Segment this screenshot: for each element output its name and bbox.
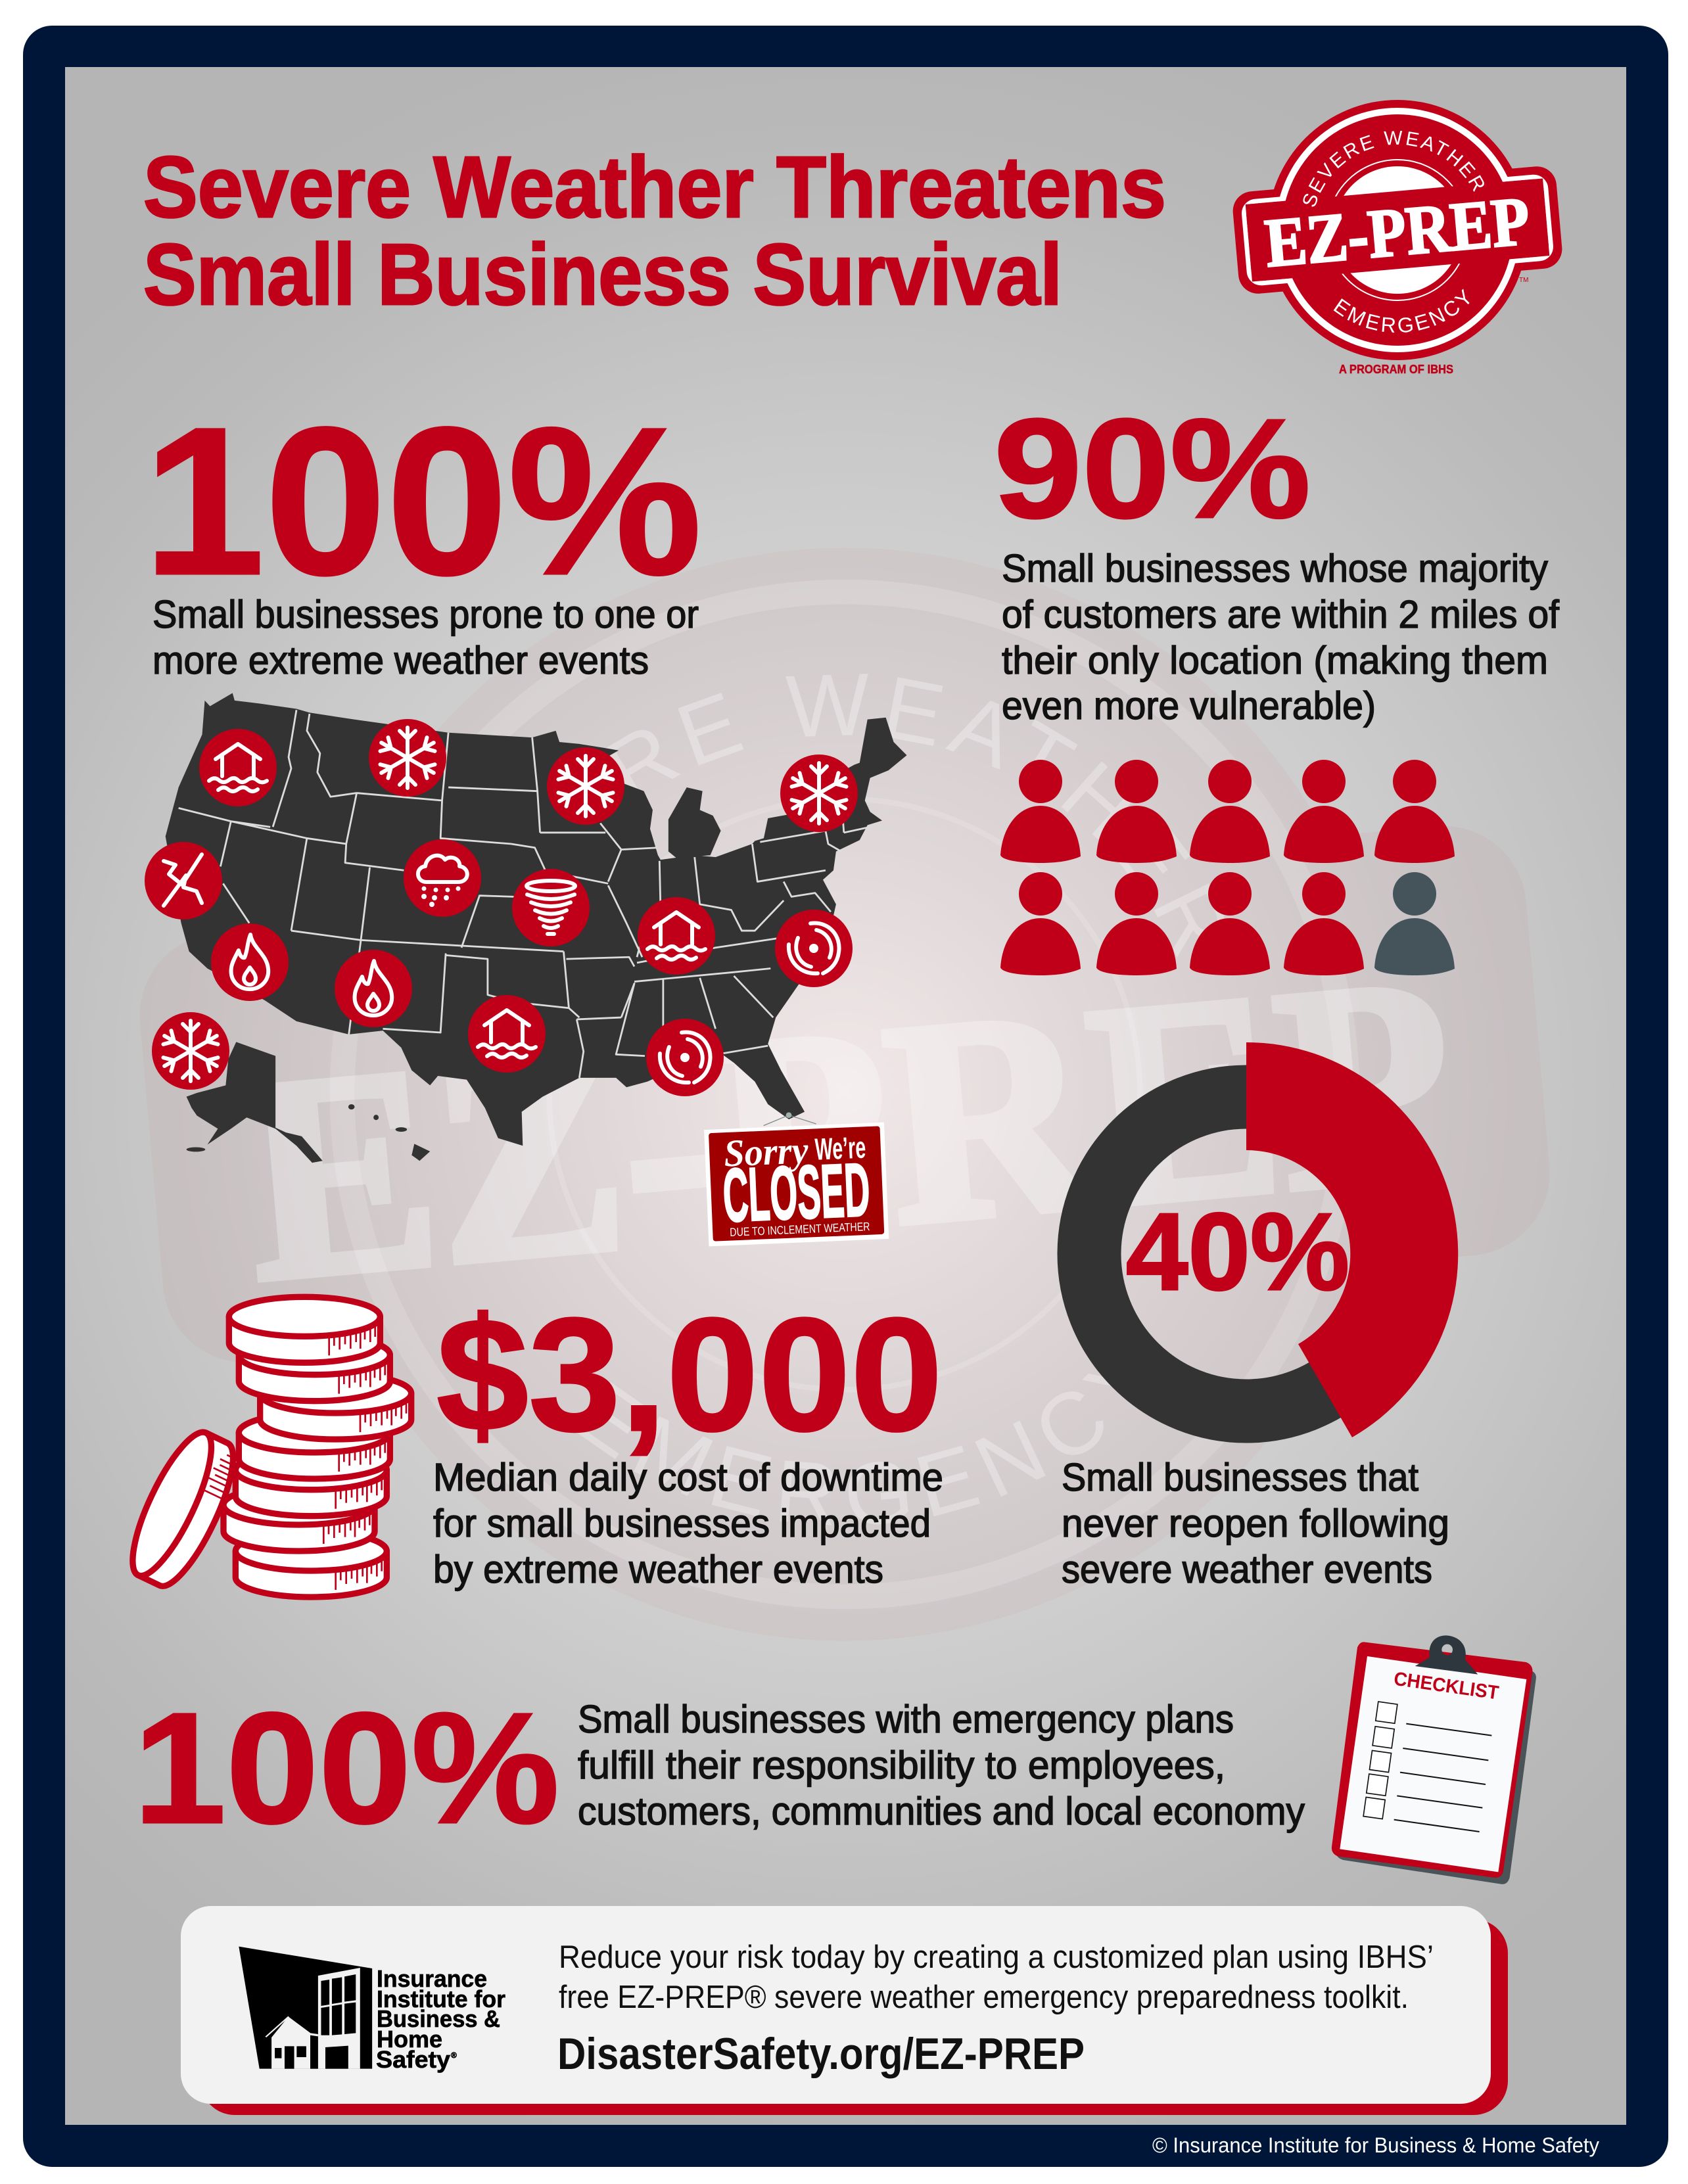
watermark: faded EZ-PREP logo [256, 674, 1443, 1525]
icon: coin stack [118, 1297, 411, 1597]
title [143, 139, 1166, 323]
IBHS logo [239, 1947, 505, 2073]
stat: 100% emergency plans: customers, communities and local economy [578, 1790, 1305, 1833]
US map [145, 693, 906, 1163]
call to action text [557, 1940, 1434, 2079]
IBHS logo: Home [377, 2026, 442, 2053]
closed sign: We’re [814, 1130, 866, 1167]
stat: 90%: 90% [994, 389, 1311, 547]
donut chart 40% [1089, 1042, 1458, 1437]
closed sign: CLOSED [721, 1148, 872, 1238]
stat: $3,000: for small businesses impacted [433, 1502, 931, 1545]
call to action text: free EZ-PREP® severe weather emergency preparedness toolkit. [559, 1980, 1409, 2015]
EZ-PREP logo: SEVERE WEATHER [1303, 131, 1484, 206]
IBHS logo: Safety [376, 2046, 450, 2073]
stat text: never reopen: severe weather events [1062, 1548, 1432, 1591]
closed sign: Sorry [723, 1128, 810, 1175]
IBHS logo: Insurance [377, 1965, 487, 1992]
watermark: faded EZ-PREP logo: SEVERE WEATHER [606, 674, 1224, 957]
IBHS logo: ® [451, 2051, 457, 2060]
stat: 100% emergency plans [133, 1680, 1305, 1856]
stat: $3,000 [433, 1284, 943, 1591]
donut chart 40%: 40% [1126, 1191, 1349, 1313]
stat: 100% emergency plans: Small businesses with emergency plans [578, 1698, 1234, 1741]
people pictogram: 9 of 10 [1000, 760, 1455, 975]
stat: 90%: their only location (making them [1002, 639, 1548, 682]
icon: checklist clipboard: CHECKLIST [1392, 1668, 1500, 1704]
copyright footer: © Insurance Institute for Business & Home Safety [1152, 2133, 1599, 2157]
watermark: faded EZ-PREP logo: EMERGENCY [577, 1374, 1111, 1525]
watermark: faded EZ-PREP logo: EZ-PREP [234, 917, 1464, 1341]
call to action text: DisasterSafety.org/EZ-PREP [557, 2029, 1085, 2079]
stat text: never reopen: never reopen following [1062, 1502, 1449, 1545]
stat text: never reopen [1062, 1456, 1449, 1591]
weather icons on map [145, 719, 858, 1096]
panel: call to action [181, 1906, 1508, 2115]
stat: 90%: Small businesses whose majority [1002, 547, 1548, 590]
stat: $3,000: by extreme weather events [433, 1548, 883, 1591]
stat: 100% emergency plans: fulfill their responsibility to employees, [578, 1744, 1225, 1787]
stat: 100% extreme weather: more extreme weather events [152, 639, 649, 682]
stat: $3,000: Median daily cost of downtime [433, 1456, 943, 1499]
title: Severe Weather Threatens [143, 139, 1166, 235]
closed sign [704, 1112, 889, 1246]
stat: $3,000: $3,000 [436, 1284, 943, 1464]
stat text: never reopen: Small businesses that [1062, 1456, 1418, 1499]
stat: 100% emergency plans: 100% [133, 1680, 559, 1856]
IBHS logo: Business & [377, 2005, 500, 2032]
closed sign: DUE TO INCLEMENT WEATHER [730, 1220, 870, 1239]
EZ-PREP logo: EMERGENCY [1333, 289, 1470, 333]
title: Small Business Survival [143, 226, 1062, 323]
stat: 90% [994, 389, 1560, 728]
stat: 100% extreme weather: 100% [143, 383, 702, 618]
EZ-PREP logo: TM [1519, 277, 1528, 284]
stat: 90%: even more vulnerable) [1002, 684, 1376, 728]
EZ-PREP logo: EZ-PREP [1262, 182, 1533, 281]
icon: checklist clipboard [1332, 1635, 1536, 1884]
EZ-PREP logo: A PROGRAM OF IBHS [1339, 363, 1453, 376]
IBHS logo: Institute for [377, 1986, 505, 2012]
call to action text: Reduce your risk today by creating a customized plan using IBHS’ [559, 1940, 1434, 1975]
stat: 100% extreme weather: Small businesses prone to one or [152, 593, 699, 636]
stat: 90%: of customers are within 2 miles of [1002, 593, 1560, 636]
EZ-PREP logo [1233, 100, 1562, 376]
